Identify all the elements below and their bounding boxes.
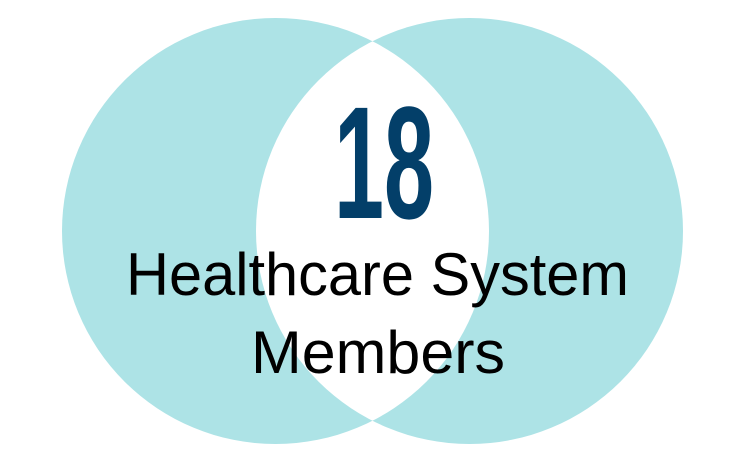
big number: 18	[334, 73, 434, 252]
right circle	[256, 18, 683, 444]
left circle	[62, 18, 489, 444]
label line 1: Healthcare System	[126, 241, 629, 308]
venn graphic	[62, 18, 683, 444]
label line 2: Members	[251, 319, 505, 386]
overlap lens	[256, 42, 489, 420]
